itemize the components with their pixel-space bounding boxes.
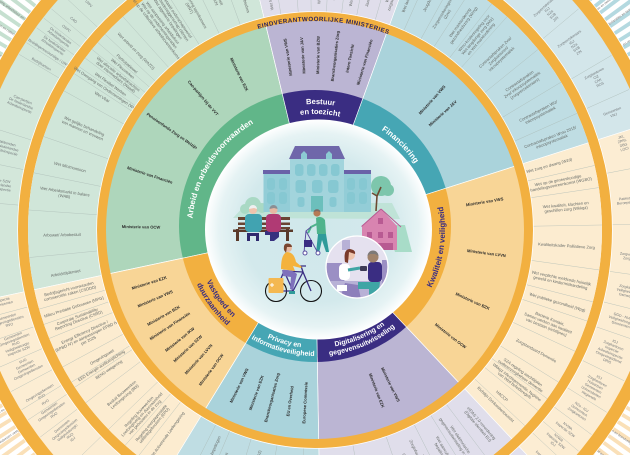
outer ring labels: teal sector: SVB xyxy=(549,12,557,20)
outer ring labels: orange sector right: Universiteiten xyxy=(580,385,601,399)
ring 1 labels: green sector: Wet Vbar xyxy=(94,90,111,104)
ring 1 labels: orange sector left: utiliteitsgebouwen (EPU) xyxy=(138,406,171,444)
ring 1 labels: teal sector: Contractafspraken xyxy=(504,69,535,93)
theme title: digitalisering en gegevensuitwisseling: Digitalisering en xyxy=(334,322,384,346)
outer ring labels: green sector: De Nederlandse xyxy=(43,35,66,53)
outer ring labels: orange sector left: Gemeenten xyxy=(15,359,34,371)
ring 1 labels: teal sector: Contractafspraken Wmo 2015/ xyxy=(523,125,577,149)
outer ring labels: orange sector right: LOCI xyxy=(620,146,629,152)
ring 1 labels: teal sector xyxy=(401,0,580,154)
ring 1 labels: teal sector: inkoopsystematiek xyxy=(524,105,557,125)
outer ring labels: orange sector left: RVO xyxy=(66,432,75,440)
ring 1 labels: green sector: Wet gelijke behandeling xyxy=(63,115,105,137)
ministries: arbeid: Ministerie van Financiën xyxy=(127,165,174,185)
outer ring labels: orange sector left: Veiligheidsregio xyxy=(5,341,30,354)
ring 1 labels: green sector: Wet arbeid en zorg (WAZO) xyxy=(117,31,156,71)
theme title: bestuur en toezicht: en toezicht xyxy=(300,109,340,117)
ring 1 labels: orange sector left: Leefomgeving (Bbl) xyxy=(109,383,140,410)
ring 1 labels: green sector: Wet Overgang van Ondernemingen (WOO) xyxy=(73,65,141,114)
illustration: bush xyxy=(240,197,267,214)
outer ring labels: orange sector right xyxy=(535,134,630,455)
ring 1 labels: orange sector left xyxy=(42,280,186,455)
ring 1 labels: green sector: Wet Arbeidsmarkt in balans xyxy=(40,185,90,197)
ring 1 labels: orange sector left: (EPBD IV) en aanpassingen EPBD IV xyxy=(54,319,119,353)
ring 1 labels: teal sector: Contractafspraken Zvw/ xyxy=(478,36,513,69)
ministries: arbeid: Pensioenfonds Zorg en Welzijn xyxy=(146,112,199,150)
outer ring labels: orange sector right: ZPRL xyxy=(617,138,627,144)
theme title: kwaliteit en veiligheid: Kwaliteit en veiligheid xyxy=(426,207,447,288)
ring 1 labels: orange sector right: Zorgstandaard Dementie xyxy=(515,338,558,364)
outer ring labels: green sector: Cao-partijen xyxy=(13,94,32,105)
ministries: bestuur en toezicht: Intern Toezicht xyxy=(344,43,355,73)
ring 1 labels: green sector: Arbeidstijdenwet xyxy=(50,268,82,278)
ring 1 labels: purple sector bottom: Wet elektronische xyxy=(449,425,472,454)
ring 1 labels: orange sector right: behandelingsovereenkomst (WGBO) xyxy=(526,176,593,194)
outer ring labels: orange sector right: Arbeidsinspectie xyxy=(597,347,623,360)
outer ring labels: orange sector left: Gemeenten xyxy=(17,363,36,375)
ring 1 labels: orange sector right: Wet publieke gezondheid (Wpg) xyxy=(529,291,587,313)
ministries: privacy: Ministerie van EZK xyxy=(248,375,265,411)
ring 1 labels: orange sector right: SZA-regeling wachtlijsten xyxy=(503,357,543,387)
outer ring labels: orange sector right: DBG xyxy=(619,142,628,148)
outer ring labels: teal sector: ROS xyxy=(596,81,605,88)
outer ring labels: green sector: De Nederlandse xyxy=(8,97,34,111)
theme title: bestuur en toezicht: Bestuur xyxy=(306,98,336,106)
outer ring labels: orange sector left xyxy=(0,296,86,451)
ring 1 labels: teal sector: Wet langdurige zorg (Wlz) xyxy=(460,16,495,56)
outer ring labels: green sector: CAO xyxy=(69,16,78,24)
ring 1 labels: teal sector: gezondheidszorg (Wmg) xyxy=(449,5,479,45)
ministries: digitalisering xyxy=(368,366,401,409)
illustration: tree xyxy=(371,176,394,211)
ministries: financiering xyxy=(418,84,458,127)
ring 1 labels: green sector: Wet Minimumloon xyxy=(54,160,87,174)
ring 1 labels: purple sector bottom: (Digitale identiteit EU) xyxy=(463,409,493,443)
outer ring labels: orange sector left: IGJ xyxy=(69,436,76,443)
ministries: digitalisering: Ministerie van EZK xyxy=(368,373,386,409)
outer ring labels: orange sector right: Gemeenten xyxy=(611,320,630,329)
illustration: person with walker xyxy=(303,209,329,255)
theme title: financiering: Financiering xyxy=(382,126,418,164)
ring 1 labels: green sector: van mannen en vrouwen xyxy=(61,119,105,142)
ministries: kwaliteit en veiligheid: Ministerie van BZK xyxy=(455,291,491,311)
ring 1 labels: teal sector: Zorgkantoren/ xyxy=(487,44,510,66)
ministries: bestuur en toezicht: Ministerie van Financiën xyxy=(355,38,374,86)
outer ring labels: orange sector right: Inspectie xyxy=(604,345,619,354)
outer ring labels: teal sector: Gemeenten xyxy=(603,106,622,117)
outer ring labels: orange sector left: Inspectie SZW xyxy=(7,345,31,357)
ring 1 labels: green sector: Wet aanpassing arbeidsduur xyxy=(145,1,181,45)
outer ring labels: orange sector left: RVO xyxy=(37,393,46,400)
ring 1 labels: orange sector right: Bacterie Kontakt, xyxy=(534,311,565,327)
illustration: bench with seniors xyxy=(233,205,293,241)
ministries: vastgoed: Ministerie van EZK xyxy=(131,275,167,291)
outer ring labels: orange sector left: RVO xyxy=(12,340,20,347)
illustration: lawn xyxy=(233,203,400,219)
ring 1 labels: orange sector left: Regeling energieprestatie xyxy=(134,403,168,442)
theme band ring xyxy=(179,90,451,362)
ministries: financiering: Ministerie van VWS xyxy=(418,84,447,116)
outer ring labels: orange sector left: Veiligheidsregio xyxy=(57,423,78,442)
ring 1 labels: orange sector right: geschillen zorg (Wkkgz) xyxy=(544,205,589,214)
outer ring labels: orange sector right: Zorgkantoren xyxy=(603,340,624,352)
ring 1 labels: green sector: Wet allocatie arbeidskrachten xyxy=(96,55,141,92)
outer ring labels: teal sector: NZa xyxy=(570,42,578,49)
illustration: care home building xyxy=(263,146,371,212)
outer ring labels: orange sector right: Gemeenten xyxy=(584,382,602,395)
outer ring labels: orange sector right: Huisartsen xyxy=(587,379,604,391)
outer ring labels: orange sector right: Regionale xyxy=(581,390,597,402)
outer ring labels: orange sector right: Zorgkantoren xyxy=(567,406,587,422)
ring 1 labels: teal sector: Wet marktordening xyxy=(448,7,472,38)
ring 1 labels: orange sector right: Wet op de geneeskundige xyxy=(534,173,582,187)
outer ring labels: teal sector: SVB xyxy=(573,45,581,53)
ministries: vastgoed: Ministerie van IKW xyxy=(164,326,196,353)
ring 1 labels: teal sector: Wmo-kostenregeling voor xyxy=(457,14,491,53)
outer ring labels: teal sector: IGJ xyxy=(568,39,575,46)
middle ring: responsible ministries xyxy=(106,21,524,439)
ministries: vastgoed: Ministerie van Financiën xyxy=(149,310,191,341)
ministries: bestuur en toezicht: Brancheorganisaties Zorg xyxy=(330,30,340,82)
ring 1 labels: orange sector left: Omgevingswet xyxy=(89,347,116,366)
ministries: privacy xyxy=(229,367,309,424)
outer ring labels: orange sector left: RVO xyxy=(41,399,50,406)
outer ring labels: green sector: Arbeidsinspectie xyxy=(40,38,64,56)
ring 1 labels: green sector: Wet Flexwerken xyxy=(110,57,136,80)
outer ring labels: green sector: Arbeidsinspectie xyxy=(47,29,70,48)
ministries: vastgoed: Ministerie van VWS xyxy=(137,289,174,308)
outer ring labels: green sector: De Nederlandse xyxy=(49,26,72,45)
ministries: vastgoed: Ministerie van LVVN xyxy=(184,343,213,375)
outer ring labels: orange sector right: Zorgkantoren xyxy=(587,374,607,388)
ministries: privacy: Ministerie van VWS xyxy=(229,367,250,404)
illustration: cyclist with delivery box xyxy=(266,243,322,302)
ring 1 labels: orange sector right: Wet zorg en dwang (Wzd) xyxy=(526,157,573,174)
ring 1 labels: orange sector left: Milieu Prestatie Gebouwen (MPG) xyxy=(44,295,105,319)
outer ring labels: orange sector right: IGJ xyxy=(596,374,603,381)
ring 1 labels: purple sector top xyxy=(259,0,404,11)
ring 1 labels: orange sector right: HACCP xyxy=(495,389,509,403)
outer ring labels: orange sector right: Gemeenten xyxy=(570,404,588,418)
outer ring labels: green sector: Bedrijfsgeneeskundige / UWV xyxy=(27,38,70,68)
ministries: vastgoed: Ministerie van SZW xyxy=(172,334,203,363)
ring 1 labels: green sector: door intermediairs (Waadi) xyxy=(95,60,137,94)
outer ring labels: orange sector right: IGJ xyxy=(549,441,556,448)
outer ring labels: teal sector: CIZ xyxy=(593,74,600,80)
outer ring labels: teal sector: CAK xyxy=(594,77,603,85)
outer ring labels: teal sector xyxy=(533,0,623,121)
outer ring labels: orange sector left: RVO xyxy=(5,322,14,328)
ring 1 labels: orange sector left: Reporting Directive (CSRD) xyxy=(54,309,104,331)
ring 1 labels: orange sector left: Leefomgeving en duurzaamheid xyxy=(120,391,164,438)
ring 1 labels: teal sector: inkoopsystematiek xyxy=(488,45,516,72)
ring 1 labels: teal sector: en Wet marktordening xyxy=(466,21,496,56)
ring 1 labels: teal sector: (zorgverzekeraars) xyxy=(509,76,541,100)
ring 1 labels: orange sector left: commerciële zaken (CSDDD) xyxy=(43,284,97,302)
ring 1 labels: orange sector right: Samen werken aan kwaliteit xyxy=(524,311,574,335)
ring 1 labels: orange sector left: BENG-wetgeving xyxy=(94,358,124,380)
outer ring labels: orange sector right: NZa - IGJ xyxy=(574,401,589,413)
ministries: kwaliteit en veiligheid xyxy=(434,196,506,350)
ring 1 labels: teal sector: inkoopsystematiek xyxy=(535,133,569,150)
outer ring labels: orange sector right: Inspectie SZW xyxy=(555,421,576,439)
ring 1 labels: teal sector: Zvw/ inkoopsystematiek xyxy=(503,70,542,99)
outer ring labels: teal sector: NZa xyxy=(546,9,554,17)
ministries: bestuur en toezicht xyxy=(282,30,374,86)
ring 1 labels: orange sector right: Wkkgz infectiepreventie, hygiëne xyxy=(492,362,542,402)
ministries: bestuur en toezicht: Ministerie van J&V xyxy=(299,37,306,74)
ring 1 labels: green sector: Participatiewet xyxy=(115,53,139,75)
ring 1 labels: orange sector left: Bedrijfsgericht voorwaarden xyxy=(44,280,94,297)
ring 1 labels: orange sector right: Kwaliteitskader Palliatieve Zorg xyxy=(538,241,596,250)
ring 1 labels: green sector: (WAB) xyxy=(58,193,71,199)
ring 1 labels: orange sector left: per 2025 xyxy=(80,334,97,346)
ring 1 labels: orange sector left: Regeling bouwwerken xyxy=(123,395,154,428)
outer ring labels: orange sector left: Gemeenten xyxy=(54,419,71,434)
ministries: privacy: Europese Commissie xyxy=(301,381,309,424)
outer ring labels: teal sector: Zorgkantoren xyxy=(584,67,605,80)
theme title: digitalisering en gegevensuitwisseling: gegevensuitwisseling xyxy=(329,324,395,356)
outer ring labels: orange sector left: Omgevingsdiensten xyxy=(25,383,54,403)
ministries: kwaliteit en veiligheid: Ministerie van OCW xyxy=(434,322,467,350)
outer ring labels: orange sector right: NVWA xyxy=(562,421,573,431)
central illustration background disc xyxy=(205,120,432,340)
ministries: arbeid: Ministerie van OCW xyxy=(122,224,160,230)
outer ring labels: orange sector right: Inspectie SZW xyxy=(546,432,566,451)
ring 1 labels: teal sector: (Zvw) xyxy=(442,8,452,20)
ministries: kwaliteit en veiligheid: Ministerie van LVVN xyxy=(467,248,506,258)
ministries: privacy: EU en Overheid xyxy=(285,385,295,417)
ministries: digitalisering: Ministerie van VWS xyxy=(380,366,401,403)
outer ring labels: teal sector: VNJ xyxy=(610,112,618,118)
ministries: arbeid xyxy=(122,57,250,230)
theme title: vastgoed en duurzaamheid: duurzaamheid xyxy=(197,283,230,326)
outer ring labels: orange sector left: Gemeenten xyxy=(4,331,23,342)
outer ring labels: orange sector left: RVO xyxy=(19,358,27,365)
heading: eindverantwoordelijke ministeries: EINDVERANTWOORLIJKE MINISTERIES xyxy=(257,16,390,34)
ring 1 labels: orange sector left: Energy Efficiency Directive / xyxy=(60,319,109,345)
ring 1 labels: purple sector bottom xyxy=(340,406,497,455)
outer ring labels: orange sector right: JKL xyxy=(618,134,625,140)
orange ring: eindverantwoordelijke ministeries xyxy=(102,17,528,443)
outer ring labels: orange sector right: IGJ xyxy=(612,339,618,345)
theme title: privacy en informatieveiligheid: Privacy en xyxy=(268,334,301,348)
ministries: financiering: Ministerie van J&V xyxy=(428,99,458,127)
ring 1 labels: orange sector left: EED Energie-auditverplichting xyxy=(77,348,126,382)
ring 1 labels: green sector: Wet Flexibel Werken xyxy=(94,71,128,98)
ring 1 labels: orange sector right: Wet kwaliteit, klachten en xyxy=(543,200,589,209)
outer ring labels: orange sector left: Omgevingsdiensten xyxy=(13,364,44,381)
ministries: arbeid: Cao-partijen bij de VVT xyxy=(187,79,220,117)
ring 1 labels: purple sector bottom: eIDAS 2.0-verordening xyxy=(466,406,497,441)
outer ring labels: green sector xyxy=(0,0,94,193)
illustration: pink house xyxy=(362,209,412,252)
ring 1 labels: teal sector bottom xyxy=(196,435,290,455)
ministries: privacy: Brancheorganisaties Zorg xyxy=(263,372,281,423)
outer ring labels: green sector: Bedrijfsartsen xyxy=(31,57,52,72)
outer ring labels: green sector: OSPC xyxy=(61,24,72,34)
illustration: nurse with patient inset xyxy=(325,235,389,299)
ministries: bestuur en toezicht: Ministerie van VWS xyxy=(282,38,293,76)
outer ring labels: green sector: Arbeidsinspectie xyxy=(6,100,32,115)
theme title: privacy en informatieveiligheid: informatieveiligheid xyxy=(252,334,314,356)
outer ring labels: orange sector right: Omgevingsdienst xyxy=(595,350,622,364)
outer ring labels: teal sector: ZIN xyxy=(552,15,560,23)
outer ring labels: teal sector: IGJ xyxy=(544,6,551,13)
ring 1 labels: green sector: (WNT) xyxy=(184,2,195,15)
ring 1 labels: orange sector left: Corporate Sustainability xyxy=(56,306,98,326)
ring 1 labels: teal sector: Contractafspraken Wlz/ xyxy=(518,99,558,123)
ring 1 labels: orange sector right: Richtlijn Drinkwatertoezicht xyxy=(476,385,516,424)
outer ring labels: orange sector left: Omgevingsdiensten xyxy=(38,401,66,423)
ring 1 labels: green sector: Arbowet/ Arbobesluit xyxy=(43,232,82,238)
outer ring labels: teal sector: ZIN xyxy=(576,49,583,56)
outer ring labels: orange sector right: NVWA xyxy=(553,433,564,443)
ministries: kwaliteit en veiligheid: Ministerie van VWS xyxy=(466,196,504,207)
outer ring labels: orange sector left: RVO xyxy=(50,411,59,419)
ring 1 labels: orange sector right: van Wzd beleidsregels xyxy=(497,371,533,400)
ring 1 labels: orange sector right: van bestaan (richtlijnen) xyxy=(525,317,568,338)
outer ring labels: orange sector left: Omgevingsdiensten xyxy=(51,418,78,441)
theme title: bestuur en toezicht xyxy=(300,98,340,117)
ring 1 labels: orange sector right xyxy=(476,157,596,424)
ministries: arbeid: Ministerie van EZK xyxy=(229,57,250,92)
ring 1 labels: orange sector right: geweld en kindermishandeling xyxy=(533,275,589,291)
ring 1 labels: green sector: Wet op de ondernemingsraden xyxy=(140,2,179,50)
outer ring labels: teal sector: Zorgverzekeraars xyxy=(557,29,582,49)
ministries: vastgoed: Ministerie van BZK xyxy=(146,304,181,327)
ministries: bestuur en toezicht: Ministerie van BZW xyxy=(315,36,321,74)
ring 1 labels: orange sector left: van gebouwen in de zorg xyxy=(127,398,163,436)
ministries: vastgoed xyxy=(131,275,225,387)
ring 1 labels: orange sector left: Besluit Bouwwerken xyxy=(106,379,137,407)
ring 1 labels: orange sector right: Wet verplichte meldcode huiselijk xyxy=(531,269,591,287)
outer ring labels: orange sector left: Gemeenten xyxy=(40,401,58,415)
theme title: vastgoed en duurzaamheid: Vastgoed en xyxy=(207,279,235,317)
outer ring labels: orange sector right: DRIS xyxy=(602,358,612,365)
theme title: arbeid en arbeidsvoorwaarden: Arbeid en arbeidsvoorwaarden xyxy=(187,120,254,218)
ring 1 labels: orange sector right: ouderenzorgbeheer dementie xyxy=(497,358,545,394)
ring 1 labels: green sector xyxy=(39,0,251,278)
ministries: vastgoed: Ministerie van OCW xyxy=(198,353,225,387)
